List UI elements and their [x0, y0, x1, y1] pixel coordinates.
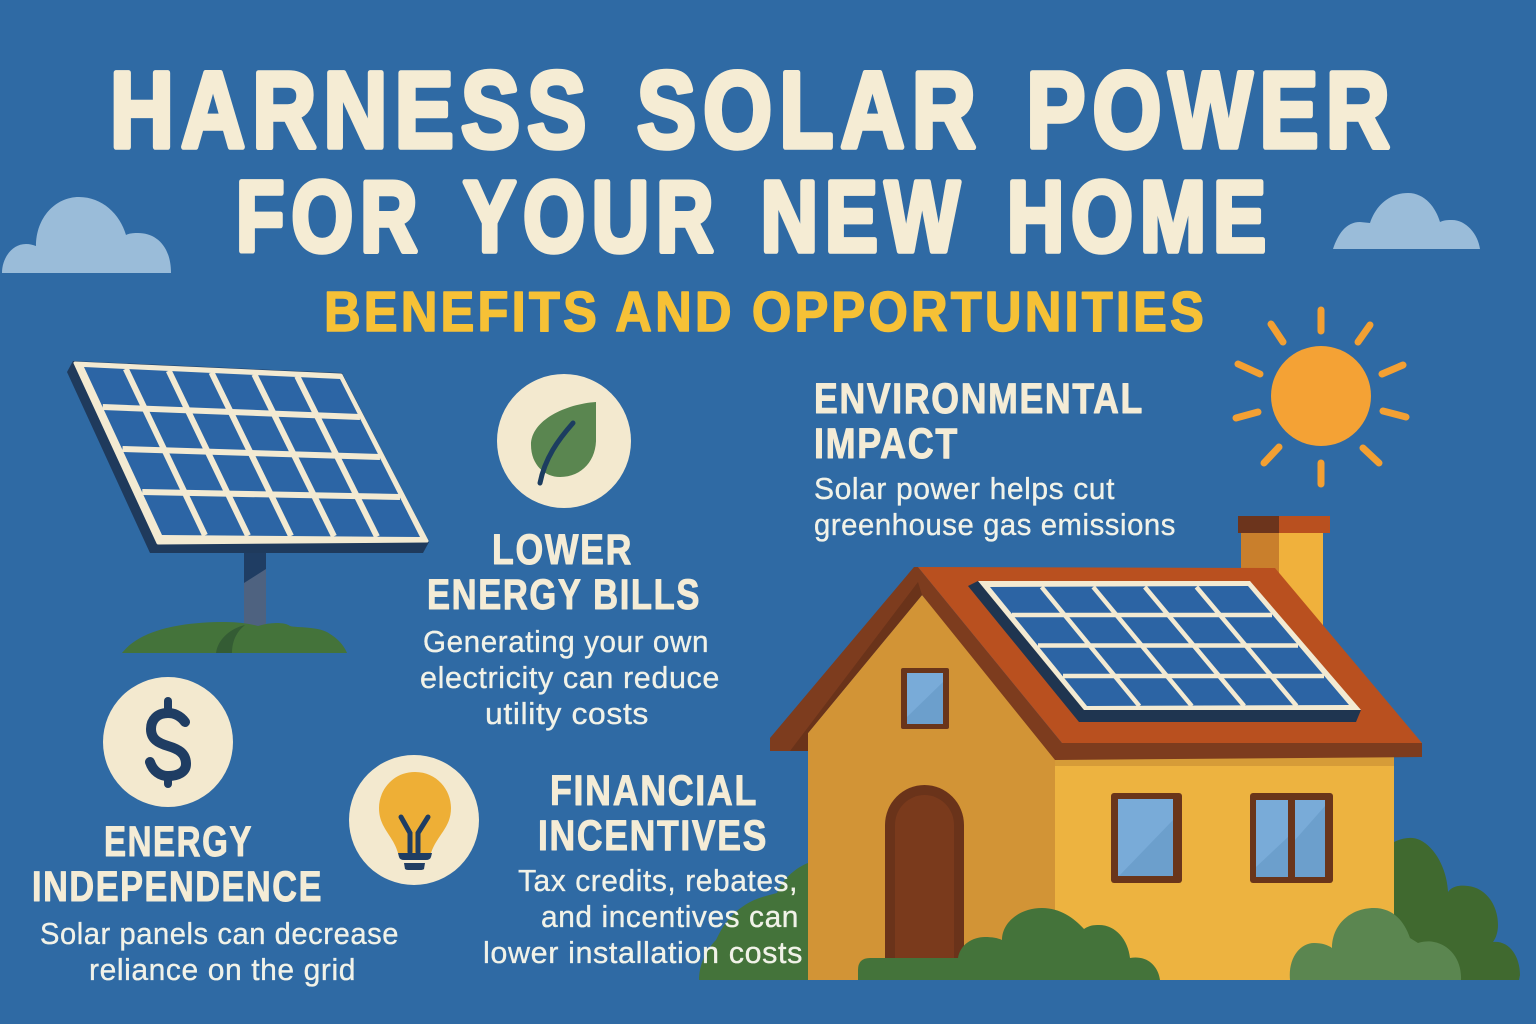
- text block: lower energy bills: Generating your own: [423, 624, 709, 659]
- window: middle: [1111, 793, 1182, 883]
- illustration: ground-mounted solar panel: [67, 361, 429, 653]
- window: right double: [1250, 793, 1333, 883]
- text block: environmental impact: [814, 375, 1176, 542]
- wall: right side: [1055, 753, 1394, 980]
- wall: gable front: [808, 595, 1055, 980]
- text block: financial incentives: INCENTIVES: [538, 812, 768, 860]
- text block: environmental impact: ENVIRONMENTAL: [814, 375, 1144, 423]
- roof: inner rake shadow: [790, 582, 922, 751]
- roof: main slope: [918, 567, 1422, 743]
- text block: lower energy bills: utility costs: [485, 696, 649, 731]
- text block: energy independence: ENERGY: [104, 818, 253, 866]
- roof panel cells: [990, 586, 1349, 706]
- bush front, left: [858, 908, 1160, 980]
- panel frame: [75, 363, 427, 543]
- roof: brown rake and fascia: [770, 567, 1422, 760]
- panel post: [244, 550, 266, 626]
- icon: light bulb badge: [349, 755, 479, 885]
- roof panel frame: [978, 581, 1361, 710]
- text block: environmental impact: Solar power helps cut: [814, 471, 1115, 506]
- title: [110, 49, 1397, 273]
- text block: lower energy bills: ENERGY BILLS: [427, 571, 701, 619]
- panel cell area: [84, 367, 420, 537]
- text block: energy independence: INDEPENDENCE: [32, 863, 323, 911]
- chimney: [1238, 516, 1330, 633]
- text block: lower energy bills: electricity can reduce: [420, 660, 720, 695]
- icon: sun: [1236, 310, 1406, 484]
- bush behind house, right: [1394, 838, 1520, 980]
- roof panel shadow: [968, 581, 1361, 722]
- title: FOR YOUR NEW HOME: [236, 161, 1273, 273]
- text block: financial incentives: Tax credits, rebates,: [518, 863, 798, 898]
- panel shadow: [67, 361, 429, 553]
- gable window: [901, 668, 949, 729]
- illustration: house: [699, 516, 1520, 980]
- panel cell grid: [103, 369, 400, 537]
- panel ground mound: [122, 622, 347, 653]
- icon: right cloud: [1333, 193, 1480, 249]
- door: [885, 785, 964, 958]
- text block: environmental impact: greenhouse gas emissions: [814, 507, 1176, 542]
- text block: environmental impact: IMPACT: [814, 420, 959, 468]
- text block: lower energy bills: LOWER: [492, 526, 633, 574]
- text block: energy independence: reliance on the grid: [89, 952, 356, 987]
- text block: financial incentives: and incentives can: [541, 899, 799, 934]
- icon: leaf badge: [497, 374, 631, 508]
- bush behind house, left: [699, 863, 808, 980]
- bush front, right: [1290, 908, 1461, 980]
- icon: dollar badge: [103, 677, 233, 807]
- text block: financial incentives: lower installation costs: [483, 935, 803, 970]
- subtitle: BENEFITS AND OPPORTUNITIES: [324, 280, 1207, 344]
- icon: left cloud: [2, 197, 171, 273]
- wall: eave shadow: [1055, 753, 1394, 766]
- text block: financial incentives: FINANCIAL: [550, 767, 758, 815]
- text block: energy independence: Solar panels can decrease: [40, 916, 399, 951]
- text block: financial incentives: [483, 767, 803, 970]
- text block: energy independence: [32, 818, 399, 987]
- text block: lower energy bills: [420, 526, 720, 731]
